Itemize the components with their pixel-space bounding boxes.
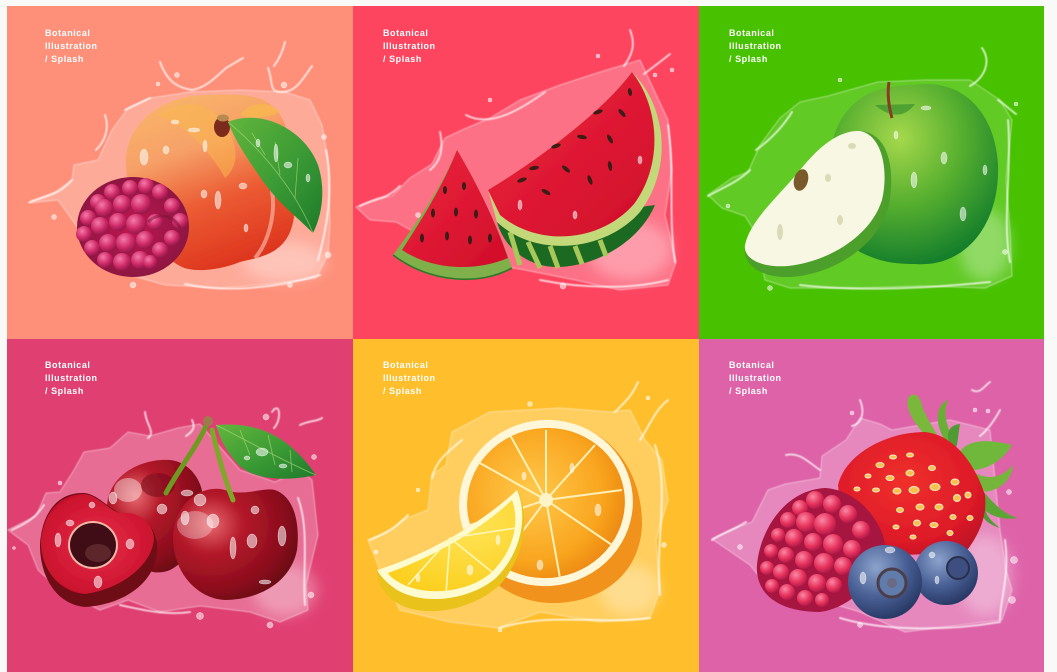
heading: apple panel: / Splash [729,54,768,64]
heading: peach panel: Illustration [45,41,98,51]
panel: orange and lemon [353,339,699,672]
splash: berries [712,382,1018,632]
leaf: peach [228,118,322,233]
heading: orange panel: Illustration [383,373,436,383]
heading: peach panel: / Splash [45,54,84,64]
splash: apple [708,48,1018,290]
fruit: front cherry [173,489,298,600]
fruit: back cherry [107,460,203,572]
heading: cherry panel: / Splash [45,386,84,396]
heading: berries panel: Illustration [729,373,782,383]
fruit: strawberry [838,432,985,555]
panel: strawberry, raspberry and blueberries [699,339,1044,672]
fruit: watermelon wedge [393,150,512,280]
heading: watermelon panel: Botanical [383,28,428,38]
stems and leaf: cherries [166,416,316,500]
heading: watermelon panel: Illustration [383,41,436,51]
leaves: strawberry calyx [907,395,1018,528]
fruit: watermelon half slice [488,72,662,268]
fruit: blueberries [848,541,978,619]
splash: watermelon [356,30,676,290]
fruit: orange half [446,406,646,603]
heading: berries panel: Botanical [729,360,774,370]
panel: green apple [699,6,1044,339]
heading: apple panel: Botanical [729,28,774,38]
splash: orange [368,382,668,632]
fruit: lemon wedge [377,490,524,611]
heading: orange panel: Botanical [383,360,428,370]
heading: orange panel: / Splash [383,386,422,396]
heading: peach panel: Botanical [45,28,90,38]
panel: peach and raspberry [7,6,353,339]
panel: watermelon [353,6,699,339]
heading: berries panel: / Splash [729,386,768,396]
fruit: raspberry [76,177,189,277]
panel: cherries [7,339,353,672]
fruit: cherry half [40,493,157,607]
heading: cherry panel: Illustration [45,373,98,383]
heading: watermelon panel: / Splash [383,54,422,64]
fruit: raspberry [757,488,885,612]
fruit: green apple [828,82,998,264]
heading: apple panel: Illustration [729,41,782,51]
splash: peach [28,42,331,289]
fruit: apple half slice [745,131,891,277]
splash: cherries [8,408,322,628]
heading: cherry panel: Botanical [45,360,90,370]
fruit: peach [126,95,296,270]
